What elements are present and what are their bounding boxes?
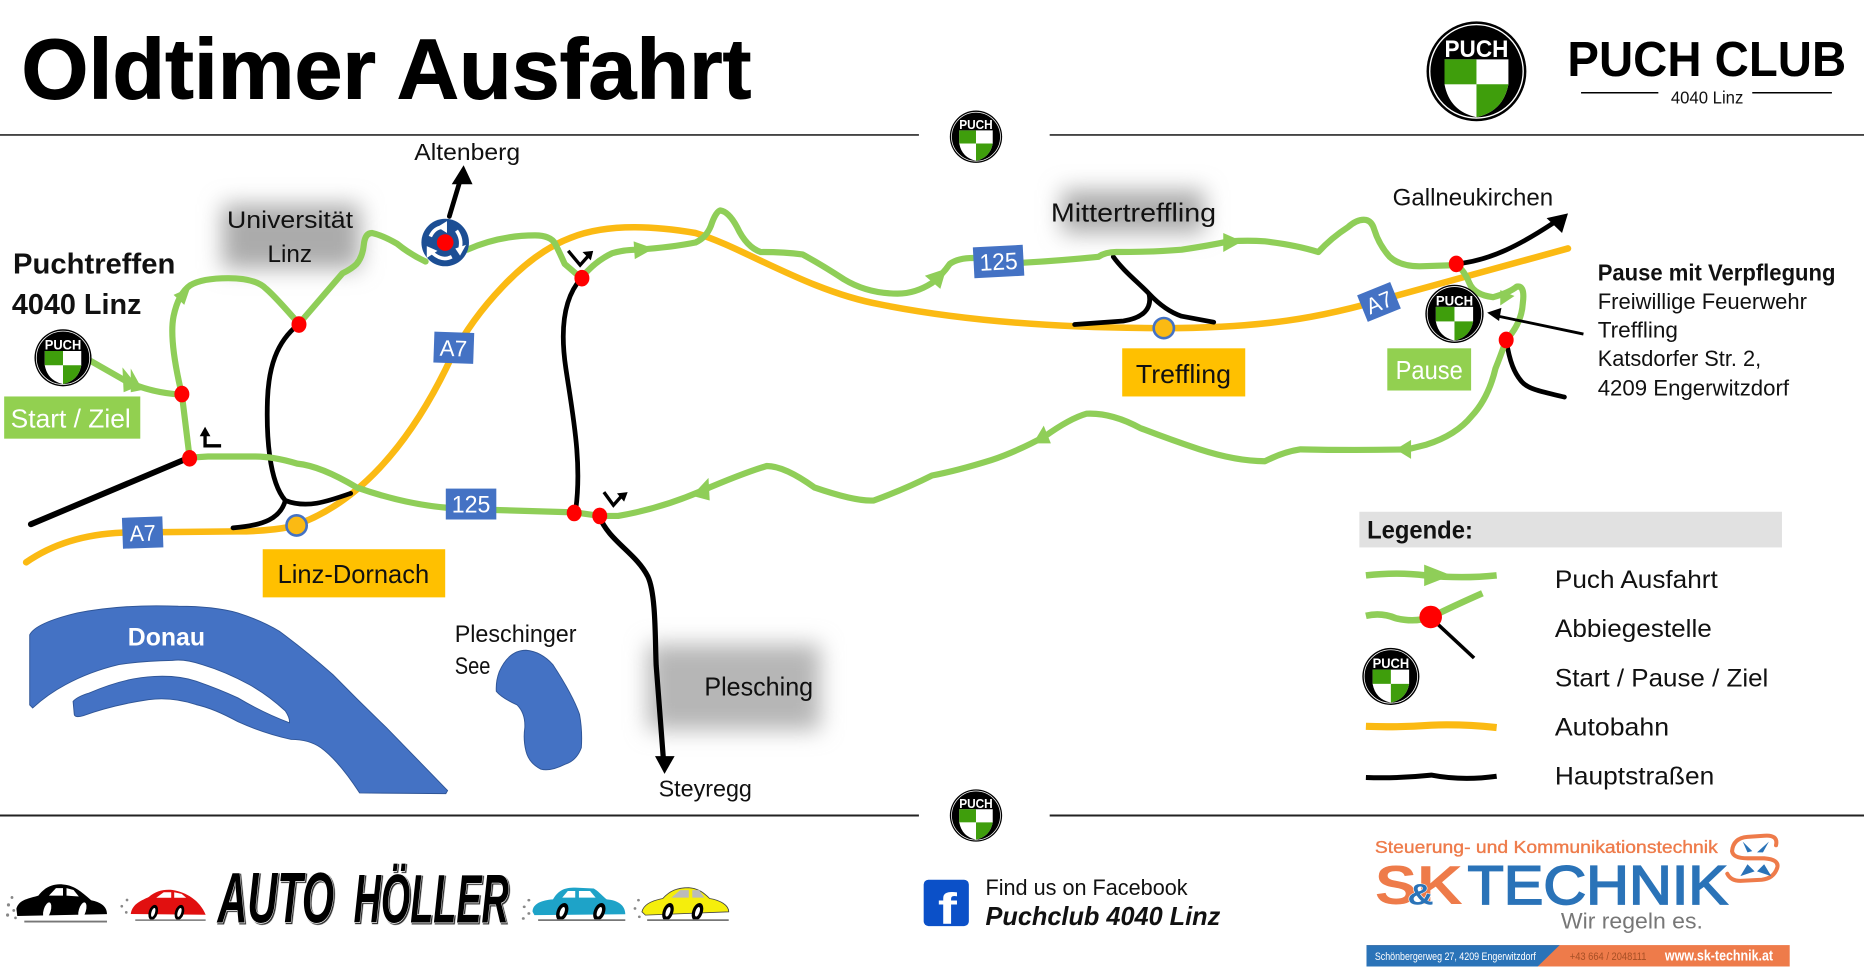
turn markers: red dots [174,256,1514,524]
lake: Pleschinger See [496,650,582,770]
sign: A7 centre [433,332,474,364]
logo: divider top: PUCH [959,118,993,132]
turn arrow: junction south [604,492,628,505]
road: Danube [30,606,448,794]
label: Steyregg: Steyregg [659,775,752,801]
water label: Donau: Donau [128,624,205,652]
label: Start / Ziel [4,396,140,439]
logo: pause marker [1425,285,1484,343]
lake label: See [455,653,490,680]
label: Puchtreffen [12,248,175,321]
icon: Facebook: f [938,885,957,934]
legend: Puch Ausfahrt [1366,565,1718,594]
panel: legend [1359,512,1782,791]
label: Linz-Dornach exit [263,549,445,597]
contact bar [1366,945,1790,966]
Facebook callout [924,875,1220,934]
panel: route map [4,139,1835,801]
sign: 125 south: 125 [452,491,490,518]
legend: Hauptstraßen: Hauptstraßen [1555,763,1714,791]
logo: Puch club header: PUCH CLUB [1567,32,1846,87]
route: Puch Ausfahrt [92,210,1523,516]
label: Gallneukirchen: Gallneukirchen [1393,185,1553,212]
turn arrow: Start [200,427,221,446]
label: Universität Linz [227,207,353,268]
logo: divider bottom: PUCH [959,797,993,811]
legend: Start / Pause / Ziel: Start / Pause / Ziel [1555,665,1768,693]
label: Mittertreffling: Mittertreffling [1051,200,1216,228]
sign: A7 west: A7 [129,520,156,546]
wordmark: AUTO HÖLLER [216,859,509,939]
place glow: Universität Linz [222,204,360,269]
legend: Abbiegestelle: Abbiegestelle [1555,615,1712,643]
wordmark: AUTO HÖLLER: AUTO [216,859,334,939]
text block: Pause mit Verpflegung: Katsdorfer Str. 2, [1598,346,1761,371]
logo: start marker [34,329,92,386]
sponsor: Auto Höller [6,859,729,939]
text block: Pause mit Verpflegung: Freiwillige Feuerwehr [1598,289,1807,314]
legend: Start / Pause / Ziel [1362,648,1768,705]
logo: pause marker: PUCH [1436,292,1473,308]
wordmark: & [1408,879,1434,912]
sign: A7 west [122,516,163,549]
place glow: Mittertreffling [1062,190,1204,233]
label: Altenberg: Altenberg [414,139,520,165]
tagline: Steuerung- und Kommunikationstechnik [1375,837,1718,857]
interchange: Linz-Dornach [286,515,307,536]
legend heading [1359,512,1782,547]
sign: 125 north [973,245,1024,278]
sponsor: S&K Technik [1366,836,1790,966]
wordmark: AUTO HÖLLER: HÖLLER [354,861,509,938]
text block: Pause mit Verpflegung [1598,260,1835,400]
car: red [120,890,206,921]
legend heading: Legende: [1367,517,1473,545]
wordmark: TECHNIK [1468,854,1728,916]
wordmark [1375,854,1728,916]
legend: Hauptstraßen [1366,763,1714,791]
sign: A7 east [1357,282,1401,322]
label: Universität Linz: Universität [227,207,353,234]
label: Puchtreffen: Puchtreffen [13,248,175,280]
logo: Puch club header [1427,21,1846,121]
label: Treffling exit: Treffling [1136,359,1231,389]
legend: Abbiegestelle [1366,593,1712,658]
wordmark: SK [1375,854,1463,916]
lake label [455,621,577,680]
logo: divider bottom [950,789,1002,842]
legend: Autobahn: Autobahn [1555,713,1669,741]
label: Puchtreffen: 4040 Linz [12,289,141,321]
car: yellow [634,888,729,922]
lake label: Pleschinger [455,621,577,648]
text block: Pause mit Verpflegung: 4209 Engerwitzdorf [1598,375,1790,400]
icon: Facebook [924,880,969,934]
label: Linz-Dornach exit: Linz-Dornach [278,559,429,589]
text: Puchclub 4040 Linz: Puchclub 4040 Linz [985,903,1220,931]
text block: Pause mit Verpflegung: Treffling [1598,318,1678,343]
logo: Puch club header: PUCH [1445,36,1508,63]
legend: Start / Pause / Ziel: PUCH [1373,656,1409,671]
text: Find us on Facebook: Find us on Facebook [985,875,1189,900]
contact bar: www.sk-technik.at [1664,949,1773,965]
contact bar: +43 664 / 2048111 [1570,951,1646,963]
icon: roundabout [421,219,469,266]
label: Treffling exit [1122,348,1245,396]
slogan: Wir regeln es. [1561,908,1703,933]
text block: Pause mit Verpflegung: Pause mit Verpflegung [1598,260,1835,286]
road: A7 motorway [26,227,1568,562]
road: main roads [31,165,1568,774]
title: Oldtimer Ausfahrt [21,23,751,118]
car: blue [522,888,625,922]
label: Universität Linz: Linz [267,241,312,268]
sign: 125 north: 125 [979,248,1018,277]
legend: Puch Ausfahrt: Puch Ausfahrt [1555,566,1718,594]
place glow: Plesching [648,644,820,730]
arrow: pause callout [1487,308,1583,334]
turn arrow: junction north [568,251,593,265]
logo: start marker: PUCH [45,338,81,353]
car: black [6,884,107,922]
interchange: Treffling [1154,318,1174,338]
label: Plesching: Plesching [704,671,813,701]
logo: divider top [950,111,1002,163]
sign: 125 south [446,489,496,520]
label: Pause [1387,348,1471,391]
icon: S badge [1727,836,1778,881]
sign: A7 centre: A7 [439,336,468,362]
logo: Puch club header: 4040 Linz [1671,87,1743,107]
label: Pause: Pause [1396,355,1463,385]
contact bar: Schönbergerweg 27, 4209 Engerwitzdorf [1375,951,1537,963]
label: Start / Ziel: Start / Ziel [11,403,131,433]
sign: A7 east: A7 [1362,286,1396,319]
